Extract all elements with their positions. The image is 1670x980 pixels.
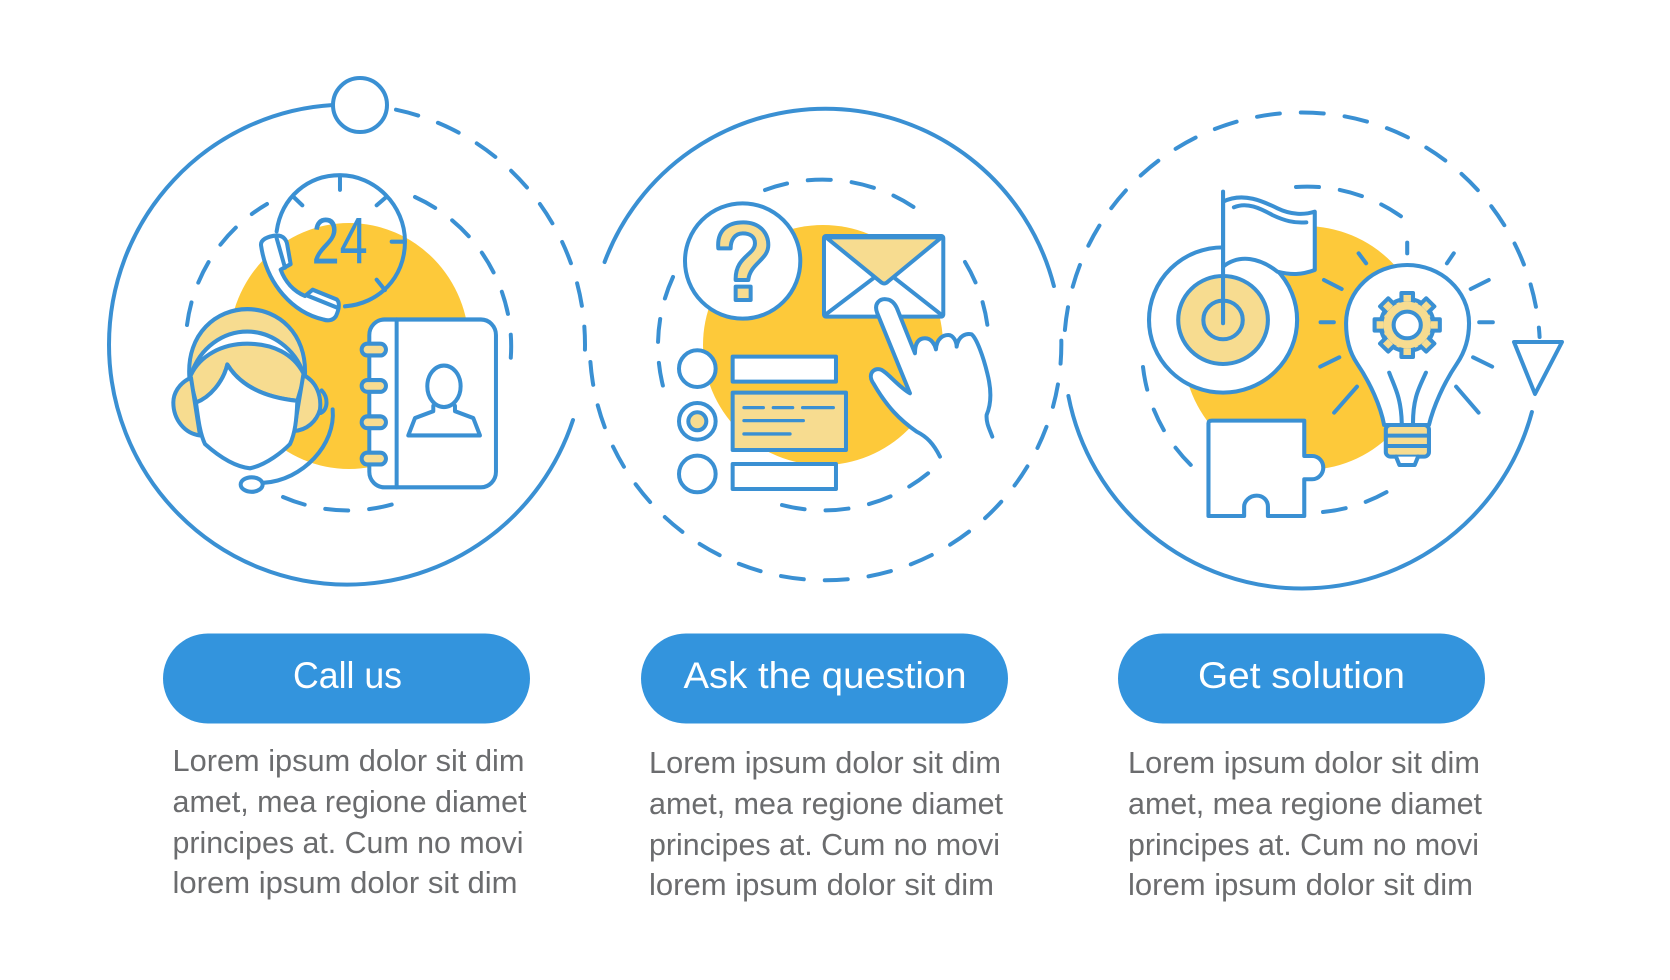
icon: form with options [679, 350, 846, 492]
24 label: 24 [312, 204, 368, 278]
inner dashed ring [1143, 187, 1406, 512]
text block: call us description: lorem ipsum dolor sit dim [172, 865, 518, 900]
text block: call us description: Lorem ipsum dolor sit dim [172, 743, 524, 778]
heading pill: Ask the question [641, 634, 1008, 724]
heading pill: Ask the question: Ask the question [684, 655, 966, 696]
yellow disc [1183, 226, 1427, 470]
text block: get solution description: lorem ipsum dolor sit dim [1128, 867, 1473, 902]
icon: puzzle piece [1208, 421, 1323, 516]
icon: support operator with headset [173, 309, 333, 492]
text block: get solution description: Lorem ipsum dolor sit dim [1128, 745, 1480, 780]
text block: call us description: principes at. Cum no movi [172, 825, 524, 860]
panel: get solution illustration [1065, 112, 1562, 588]
heading pill: Get solution [1118, 634, 1485, 724]
icon: address book [362, 320, 496, 487]
outer ring [590, 109, 1061, 580]
arrow head [1514, 342, 1562, 394]
icon: question mark bubble [685, 203, 800, 319]
outer ring with start marker [109, 78, 585, 585]
text block: get solution description [1128, 745, 1482, 902]
text block: ask the question description [649, 745, 1003, 902]
panel: ask the question illustration [590, 109, 1061, 580]
text block: ask the question description: Lorem ipsum dolor sit dim [649, 745, 1001, 780]
icon: light bulb with gear [1320, 243, 1493, 465]
text block: get solution description: amet, mea regione diamet [1128, 786, 1482, 821]
heading pill: Call us [163, 634, 530, 724]
text block: call us description: amet, mea regione diamet [172, 784, 527, 819]
text block: ask the question description: principes at. Cum no movi [649, 827, 1000, 862]
icon: pointing hand [871, 299, 992, 457]
heading pill: Get solution: Get solution [1198, 655, 1405, 696]
inner dashed ring [187, 197, 511, 510]
icon: target with flag [1149, 192, 1315, 393]
heading pill: Call us: Call us [293, 655, 402, 696]
inner dashed ring [658, 180, 988, 510]
icon: envelope [824, 236, 943, 317]
yellow disc [229, 223, 469, 469]
gear [1375, 293, 1440, 357]
text block: get solution description: principes at. Cum no movi [1128, 827, 1479, 862]
panel: call us illustration [109, 78, 585, 585]
outer ring [1065, 112, 1540, 588]
yellow disc [703, 225, 943, 465]
text block: call us description [172, 743, 527, 900]
text block: ask the question description: amet, mea regione diamet [649, 786, 1003, 821]
text block: ask the question description: lorem ipsum dolor sit dim [649, 867, 994, 902]
icon: 24 hour phone clock [261, 175, 405, 320]
